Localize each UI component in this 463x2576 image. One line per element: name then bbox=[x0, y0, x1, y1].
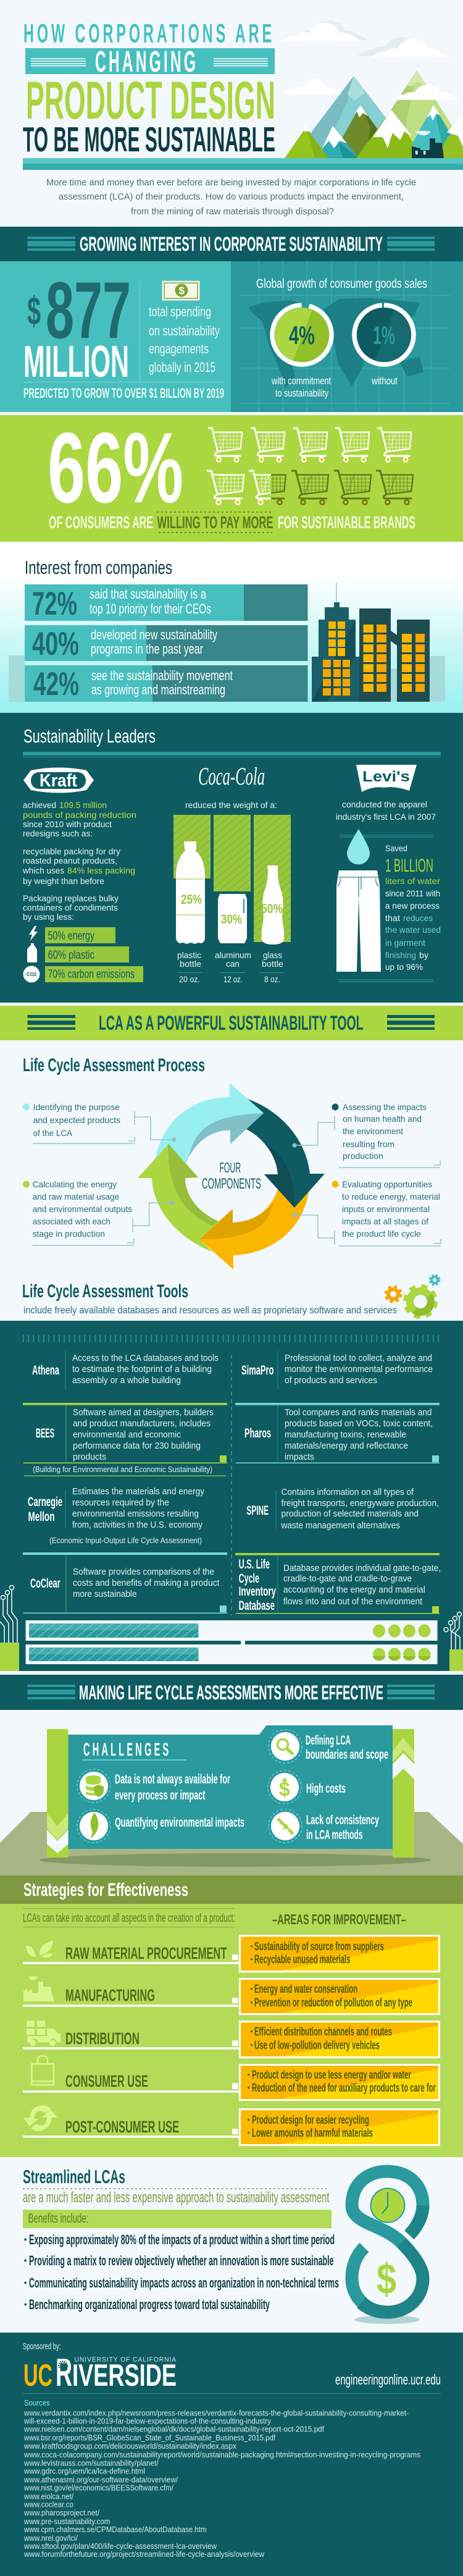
tool: BEES: environmental and economic bbox=[73, 1430, 181, 1440]
water savings text: in garment bbox=[385, 938, 425, 948]
title: CHANGING bbox=[95, 46, 198, 78]
callout: identifying bbox=[23, 1102, 176, 1143]
Kraft reduction bars: 70% carbon emissions bbox=[48, 968, 135, 981]
callout: identifying: and expected products bbox=[33, 1115, 120, 1125]
tool: Pharos: impacts bbox=[285, 1452, 314, 1462]
tool: CoClear: costs and benefits of making a product bbox=[73, 1578, 220, 1588]
Kraft reduction bars: CO2 bbox=[27, 972, 37, 977]
strategy: manufacturing: · bbox=[250, 1997, 254, 2010]
panel: interest from companies bbox=[0, 542, 463, 713]
tool: Carnegie Mellon: Estimates the materials and energy bbox=[72, 1487, 205, 1497]
strategy: post-consumer use: · bbox=[247, 2127, 251, 2140]
strategy: consumer use bbox=[23, 2056, 440, 2100]
panel: sustainability leaders bbox=[0, 713, 463, 1003]
tool: Carnegie Mellon: environmental emissions resulting bbox=[72, 1509, 199, 1519]
stat bar 42 bbox=[25, 665, 307, 702]
spending description: on sustainability bbox=[149, 323, 220, 339]
bottle labels: can bbox=[226, 959, 240, 969]
sources list: www.coca-colacompany.com/sustainabilityreport/world/sustainable-packaging.html#section-investing-in-recycling-programs bbox=[23, 2451, 420, 2459]
logo: Kraft bbox=[23, 767, 94, 793]
heading: Interest from companies bbox=[25, 557, 172, 578]
benefits list: · bbox=[23, 2297, 28, 2312]
tool: Athena: assembly or a whole building bbox=[72, 1376, 181, 1386]
Kraft text: redesigns such as: bbox=[23, 829, 93, 838]
Levi's text: conducted the apparel bbox=[342, 800, 427, 809]
callout: calculating: associated with each bbox=[33, 1216, 111, 1226]
tool: SimaPro: of products and services bbox=[285, 1376, 377, 1386]
callout: evaluating: Evaluating opportunities bbox=[342, 1179, 432, 1189]
strategy: post-consumer use: POST-CONSUMER USE bbox=[65, 2118, 179, 2136]
icon: time and money drop: $ bbox=[377, 2255, 396, 2303]
water savings text: finishing bbox=[385, 951, 416, 960]
benefits box: Benefits include: bbox=[28, 2212, 89, 2226]
heading: process: Life Cycle Assessment Process bbox=[23, 1055, 205, 1075]
strategy: post-consumer use: · bbox=[247, 2114, 251, 2127]
Kraft text: containers of condiments bbox=[23, 903, 118, 912]
callout: calculating bbox=[23, 1179, 174, 1245]
tool: BEES: and product manufacturers, includes bbox=[73, 1419, 211, 1429]
strategy: post-consumer use: Product design for easier recycling bbox=[252, 2114, 369, 2127]
heading: tools: include freely available databases and resources as well as proprietary software and services bbox=[23, 1305, 397, 1316]
Kraft text: Packaging replaces bulky bbox=[23, 894, 119, 903]
challenge: quantifying: Quantifying environmental impacts bbox=[115, 1816, 244, 1830]
lead-in: LCAs can take into account all aspects in the creation of a product: bbox=[23, 1912, 235, 1925]
sources list: www.gdrc.org/uem/lca/lca-define.html bbox=[23, 2467, 145, 2475]
challenge: costs bbox=[268, 1770, 346, 1804]
sources list: www.pre-sustainability.com bbox=[23, 2517, 110, 2526]
strategy: raw material procurement bbox=[23, 1936, 440, 1972]
heading: Streamlined LCAs bbox=[23, 2166, 125, 2187]
sources list: www.levistrauss.com/sustainability/planet/ bbox=[23, 2459, 159, 2467]
panel: strategies for effectiveness bbox=[0, 1875, 463, 2157]
stat bar 42: as growing and mainstreaming bbox=[91, 682, 225, 697]
logo: Coca-Cola: Coca-Cola bbox=[198, 762, 265, 790]
callout: assessing: the environment bbox=[343, 1126, 403, 1136]
big number 877 million: $ bbox=[27, 288, 41, 333]
strategy: consumer use: · bbox=[247, 2082, 251, 2095]
city buildings bbox=[312, 583, 430, 702]
panel: spending bbox=[0, 261, 231, 412]
Levi's text bbox=[336, 800, 436, 822]
challenge: costs: High costs bbox=[306, 1782, 346, 1796]
callout: assessing: resulting from bbox=[343, 1139, 394, 1149]
strategy: distribution bbox=[23, 2021, 440, 2057]
tool: Athena: Athena bbox=[32, 1363, 59, 1378]
water savings text: since 2011 with bbox=[385, 889, 440, 898]
chart: weight reduction bottles bbox=[173, 815, 291, 984]
aluminum can: 30% bbox=[221, 912, 242, 927]
Kraft reduction bars: 60% plastic bbox=[48, 949, 94, 962]
tool: SPINE: SPINE bbox=[247, 1504, 269, 1518]
callout: assessing: on human health and bbox=[343, 1114, 422, 1124]
logo: Kraft: Kraft bbox=[40, 771, 77, 791]
shopping carts bbox=[207, 428, 413, 510]
water savings text: up to 96% bbox=[385, 962, 423, 972]
tool: Pharos: Pharos bbox=[244, 1426, 271, 1441]
logo: UC Riverside: R bbox=[56, 2351, 72, 2394]
strategy: manufacturing bbox=[23, 1976, 440, 2014]
sources list: www.verdantix.com/index.php/newsroom/press-releases/verdantix-forecasts-the-global-sustainability-consulting-market- bbox=[23, 2409, 409, 2417]
stat bar 40 bbox=[25, 625, 307, 662]
tool: CoClear: more sustainable bbox=[73, 1589, 137, 1599]
tool: SPINE bbox=[247, 1488, 439, 1531]
tool: CoClear: CoClear bbox=[30, 1576, 60, 1591]
tool: Pharos bbox=[244, 1408, 433, 1462]
Kraft reduction bars: 50% energy bbox=[48, 930, 94, 943]
water savings text: reduces bbox=[403, 914, 433, 923]
Kraft text: achieved bbox=[23, 801, 56, 810]
stat bar 72: 72% bbox=[32, 586, 77, 622]
tool: SPINE: Contains information on all types of bbox=[282, 1488, 414, 1497]
challenge: quantifying bbox=[77, 1809, 244, 1843]
heading: tools: Life Cycle Assessment Tools bbox=[22, 1281, 188, 1302]
icon: water drop bbox=[347, 829, 370, 865]
pale background buildings bbox=[9, 655, 445, 702]
tool: CoClear bbox=[30, 1567, 220, 1599]
tool: U.S. Life Cycle Inventory Database: Database provides individual gate-to-gate, bbox=[283, 1564, 441, 1573]
donut: 1 percent: 1% bbox=[373, 321, 395, 350]
tool: Carnegie Mellon bbox=[28, 1487, 205, 1545]
donut labels bbox=[271, 375, 398, 399]
Kraft text bbox=[22, 801, 136, 922]
tool: SPINE: waste management alternatives bbox=[281, 1521, 400, 1531]
sources list bbox=[23, 2409, 420, 2559]
header illustration: mountains, clouds and factory bbox=[281, 21, 463, 159]
bottle labels bbox=[177, 951, 284, 984]
tool: U.S. Life Cycle Inventory Database: U.S. Life bbox=[239, 1557, 270, 1572]
tool: U.S. Life Cycle Inventory Database bbox=[239, 1557, 441, 1613]
strategy: raw material procurement: RAW MATERIAL PROCUREMENT bbox=[65, 1944, 227, 1963]
tool: SPINE: freight transports, energyware production, bbox=[282, 1499, 439, 1509]
server rack illustration bbox=[0, 1585, 463, 1671]
callout: calculating: stage in production bbox=[33, 1229, 105, 1239]
ground band bbox=[23, 158, 463, 170]
water savings text: by bbox=[419, 951, 428, 960]
benefits list: · bbox=[23, 2253, 28, 2268]
tool: Pharos: Tool compares and ranks materials and bbox=[285, 1408, 432, 1418]
tool: U.S. Life Cycle Inventory Database: flows into and out of the environment bbox=[283, 1597, 422, 1607]
logo: Levi's: Levi's bbox=[362, 768, 410, 785]
tool: Athena: to estimate the footprint of a building bbox=[72, 1365, 212, 1374]
section banner: making LCAs more effective bbox=[0, 1675, 463, 1710]
callout: evaluating: inputs or environmental bbox=[342, 1204, 430, 1214]
tool: Carnegie Mellon: from, activities in the U.S. economy bbox=[72, 1520, 203, 1530]
tool: SimaPro: monitor the environmental performance bbox=[285, 1365, 433, 1374]
big number 877 million: MILLION bbox=[23, 337, 129, 387]
tool: Carnegie Mellon: Mellon bbox=[28, 1510, 54, 1524]
consumers caption: WILLING TO PAY MORE bbox=[157, 513, 273, 532]
chart: four component cycle arrows: COMPONENTS bbox=[202, 1176, 261, 1192]
intro text bbox=[46, 177, 416, 217]
logo: UC Riverside: UNIVERSITY OF CALIFORNIA bbox=[75, 2356, 177, 2363]
tool: Pharos: products based on VOCs, toxic content, bbox=[285, 1419, 433, 1429]
panel: sustainability leaders: reduced the weight of a: bbox=[185, 801, 277, 810]
water savings text: Saved bbox=[385, 844, 407, 853]
benefits list: Benchmarking organizational progress toward total sustainability bbox=[29, 2297, 270, 2312]
tool: U.S. Life Cycle Inventory Database: accounting of the energy and material bbox=[283, 1585, 425, 1595]
strategy: manufacturing: MANUFACTURING bbox=[65, 1986, 155, 2005]
chart: four component cycle arrows: FOUR bbox=[220, 1160, 241, 1176]
logo: UC Riverside: UC bbox=[23, 2358, 52, 2393]
tool: U.S. Life Cycle Inventory Database: Inventory bbox=[239, 1585, 276, 1599]
strategy: post-consumer use: Lower amounts of harmful materials bbox=[252, 2127, 373, 2140]
benefits list: · bbox=[23, 2232, 28, 2247]
Kraft text: 109.5 million bbox=[59, 801, 107, 810]
section banner: growing interest bbox=[0, 227, 463, 261]
strategy: manufacturing: Energy and water conservation bbox=[254, 1983, 357, 1996]
consumers caption: OF CONSUMERS ARE bbox=[49, 513, 153, 532]
Kraft text: by using less: bbox=[23, 912, 74, 922]
stat bar 40: developed new sustainability bbox=[91, 627, 217, 642]
callout: assessing: Assessing the impacts bbox=[343, 1102, 427, 1112]
footer panel bbox=[0, 2333, 463, 2576]
bottle labels: glass bbox=[263, 951, 282, 960]
challenge: data: Data is not always available for bbox=[115, 1772, 230, 1787]
sources list: www.nrel.gov/lci/ bbox=[23, 2534, 78, 2543]
Kraft text: recyclable packing for dry bbox=[23, 847, 120, 856]
stat bar 72: said that sustainability is a bbox=[90, 586, 207, 602]
plastic bottle bbox=[176, 841, 205, 944]
sources list: www.coclear.co bbox=[23, 2501, 73, 2509]
benefits box bbox=[23, 2210, 332, 2228]
strategy: raw material procurement: · bbox=[250, 1953, 254, 1966]
tool: Pharos: manufacturing toxins, renewable bbox=[285, 1430, 406, 1440]
panel: streamlined LCAs bbox=[23, 2166, 423, 2324]
stat bar 72 bbox=[25, 584, 307, 622]
bottle labels: 8 oz. bbox=[264, 975, 280, 984]
callout: assessing bbox=[293, 1102, 440, 1168]
panel: tools directory bbox=[0, 1321, 463, 1671]
callout: identifying: of the LCA bbox=[33, 1128, 73, 1138]
callout: identifying: Identifying the purpose bbox=[33, 1102, 120, 1112]
callout: calculating: Calculating the energy bbox=[33, 1179, 117, 1189]
panel: global growth bbox=[231, 261, 463, 412]
callout: evaluating: to reduce energy, material bbox=[342, 1192, 440, 1202]
sources heading: Sources bbox=[24, 2399, 50, 2407]
benefits list bbox=[23, 2232, 339, 2312]
bottle labels: plastic bbox=[177, 951, 201, 960]
donut: 1 percent bbox=[354, 305, 414, 364]
icon: gears bbox=[385, 1275, 440, 1316]
strategy: consumer use: · bbox=[247, 2069, 251, 2082]
Kraft text: since 2010 with product bbox=[23, 820, 112, 829]
donut labels: to sustainability bbox=[275, 387, 328, 399]
sponsor: Sponsored by: bbox=[23, 2341, 60, 2352]
tool: U.S. Life Cycle Inventory Database: Cycle bbox=[239, 1572, 259, 1586]
tool: CoClear: Software provides comparisons of the bbox=[73, 1567, 214, 1577]
challenge: data bbox=[77, 1769, 230, 1803]
strategy: raw material procurement: · bbox=[250, 1940, 254, 1953]
sources list: www.cpm.chalmers.se/CPMDatabase/AboutDatabase.htm bbox=[23, 2525, 206, 2534]
donut: 4 percent bbox=[266, 299, 338, 371]
Kraft text: 84% less packing bbox=[67, 866, 135, 875]
big number 877 million bbox=[23, 265, 131, 387]
title bbox=[23, 19, 275, 159]
big number 877 million: 877 bbox=[46, 265, 131, 355]
challenge: boundaries: Defining LCA bbox=[306, 1733, 351, 1748]
challenge: boundaries bbox=[269, 1730, 388, 1763]
strategy: distribution: · bbox=[250, 2039, 254, 2052]
bottle labels: bottle bbox=[262, 959, 283, 969]
strategy: distribution: Use of low-pollution delivery vehicles bbox=[254, 2039, 380, 2052]
callout: calculating: and environmental outputs bbox=[33, 1204, 132, 1214]
heading: tools bbox=[22, 1281, 397, 1316]
Kraft text: by weight than before bbox=[23, 877, 104, 886]
heading: Strategies for Effectiveness bbox=[23, 1880, 188, 1900]
Kraft text: which uses bbox=[22, 866, 64, 875]
sources list: www.nist.gov/el/economics/BEESSoftware.cfm/ bbox=[23, 2483, 173, 2492]
Kraft text: roasted peanut products, bbox=[23, 856, 117, 865]
strategy: raw material procurement: Recyclable unused materials bbox=[254, 1953, 351, 1966]
stat bar 42: see the sustainability movement bbox=[91, 668, 233, 683]
glass bottle: 50% bbox=[261, 902, 283, 916]
tool: SPINE: production of selected materials and bbox=[282, 1509, 419, 1519]
challenge: boundaries: boundaries and scope bbox=[306, 1748, 388, 1762]
logo: UC Riverside bbox=[23, 2351, 177, 2394]
tool: BEES: performance data for 230 building bbox=[73, 1441, 201, 1451]
intro text: More time and money than ever before are being invested by major corporations in life cycle bbox=[46, 177, 416, 188]
logo: UC Riverside: IVERSIDE bbox=[72, 2358, 177, 2393]
aluminum can bbox=[218, 894, 247, 943]
section banner: LCA tool bbox=[0, 1006, 463, 1040]
donut labels: without bbox=[371, 375, 398, 387]
tool: BEES: (Building for Environmental and Economic Sustainability) bbox=[33, 1465, 212, 1474]
water savings text: that bbox=[385, 914, 400, 923]
bottle labels: 20 oz. bbox=[179, 975, 200, 984]
plastic bottle: 25% bbox=[181, 893, 202, 907]
water savings text bbox=[385, 844, 441, 972]
bottle labels: bottle bbox=[180, 959, 201, 969]
challenge: consistency: Lack of consistency bbox=[306, 1813, 379, 1827]
Levi's text: industry's first LCA in 2007 bbox=[336, 812, 436, 822]
strategy: distribution: · bbox=[250, 2026, 254, 2039]
spending description: engagements bbox=[149, 341, 209, 356]
glass bottle bbox=[261, 865, 284, 945]
stat bar 40: 40% bbox=[32, 626, 79, 662]
big number 66 percent: 66% bbox=[48, 412, 183, 524]
spending description: total spending bbox=[149, 304, 211, 319]
sources list: www.eiolca.net/ bbox=[23, 2492, 73, 2501]
stat bar 42: 42% bbox=[33, 666, 79, 702]
donut: 4 percent: 4% bbox=[289, 321, 315, 350]
callout: evaluating bbox=[293, 1179, 441, 1246]
sources list: www.bsr.org/reports/BSR_GlobeScan_State_of_Sustainable_Business_2015.pdf bbox=[23, 2434, 275, 2443]
tool: U.S. Life Cycle Inventory Database: Database bbox=[239, 1599, 275, 1613]
tool: Carnegie Mellon: Carnegie bbox=[28, 1495, 62, 1509]
chart: four component cycle arrows bbox=[138, 1083, 325, 1269]
tool: U.S. Life Cycle Inventory Database: cradle-to-gate and cradle-to-grave bbox=[283, 1574, 412, 1584]
tool: Athena bbox=[32, 1353, 219, 1386]
tool: SimaPro bbox=[241, 1353, 433, 1386]
tool: Carnegie Mellon: resources required by the bbox=[72, 1498, 169, 1508]
strategy: consumer use: CONSUMER USE bbox=[65, 2072, 148, 2090]
panel: challenges sign bbox=[0, 1725, 463, 1875]
prediction: PREDICTED TO GROW TO OVER $1 BILLION BY 2019 bbox=[23, 385, 224, 401]
consumers caption bbox=[49, 512, 415, 532]
tool: SimaPro: SimaPro bbox=[241, 1363, 274, 1378]
bottle labels: aluminum bbox=[215, 951, 251, 960]
sources list: www.nielsen.com/content/dam/nielsenglobal/dk/docs/global-sustainability-report-oct-2015.pdf bbox=[23, 2425, 324, 2434]
tool: BEES: BEES bbox=[36, 1426, 54, 1441]
tool: BEES bbox=[33, 1408, 214, 1474]
tool: SimaPro: Professional tool to collect, analyze and bbox=[285, 1353, 432, 1363]
Kraft text: pounds of packing reduction bbox=[23, 810, 136, 820]
icon: jeans bbox=[336, 870, 381, 972]
sources list: www.athenasmi.org/our-software-data/overview/ bbox=[23, 2475, 178, 2484]
challenge: costs: $ bbox=[279, 1778, 290, 1800]
strategy: post-consumer use bbox=[23, 2105, 440, 2145]
icon: time and money drop bbox=[352, 2171, 423, 2324]
tool: Athena: Access to the LCA databases and tools bbox=[72, 1353, 219, 1363]
icon: dollar bill bbox=[162, 281, 199, 300]
benefits list: · bbox=[23, 2275, 28, 2291]
water savings text: a new process bbox=[385, 901, 440, 911]
callout: assessing: production bbox=[343, 1151, 383, 1161]
sources list: www.forumforthefuture.org/project/streamlined-life-cycle-analysis/overview bbox=[23, 2550, 265, 2559]
spending description bbox=[149, 304, 220, 375]
logo: Levi's bbox=[356, 765, 417, 792]
tool: BEES: Software aimed at designers, builders bbox=[73, 1408, 214, 1418]
stat bar 40: programs in the past year bbox=[91, 641, 203, 657]
strategy: distribution: DISTRIBUTION bbox=[65, 2029, 140, 2048]
donut labels: with commitment bbox=[271, 375, 331, 387]
heading: Sustainability Leaders bbox=[23, 725, 156, 747]
strategy: manufacturing: · bbox=[250, 1983, 254, 1996]
icon: dollar bill: $ bbox=[179, 285, 185, 297]
sources list: www.sftool.gov/plan/400/life-cycle-assessment-lca-overview bbox=[23, 2542, 217, 2551]
water savings text: the water used bbox=[385, 925, 441, 935]
intro text: from the mining of raw materials through disposal? bbox=[131, 206, 334, 217]
spending description: globally in 2015 bbox=[149, 360, 215, 375]
intro text: assessment (LCA) of their products. How do various products impact the environment, bbox=[59, 192, 404, 202]
bottle labels: 12 oz. bbox=[223, 975, 243, 984]
tool: Carnegie Mellon: (Economic Input-Output Life Cycle Assessment) bbox=[49, 1536, 202, 1545]
world map bbox=[248, 298, 423, 388]
challenges heading: CHALLENGES bbox=[83, 1740, 172, 1760]
challenge: consistency: in LCA methods bbox=[306, 1828, 363, 1842]
sources list: www.pharosproject.net/ bbox=[23, 2509, 99, 2517]
water savings text: liters of water bbox=[385, 877, 441, 886]
tool: Pharos: materials/energy and reflectance bbox=[285, 1441, 408, 1451]
callout: calculating: and raw material usage bbox=[33, 1192, 119, 1202]
sources list: www.kraftfoodsgroup.com/deliciousworld/sustainability/index.aspx bbox=[23, 2442, 237, 2451]
panel: 66 percent of consumers bbox=[0, 412, 463, 542]
tool: BEES: products bbox=[73, 1452, 106, 1462]
Kraft reduction bars bbox=[23, 926, 143, 982]
clock bbox=[370, 2188, 405, 2223]
callout: evaluating: the product life cycle bbox=[342, 1229, 421, 1239]
callout: evaluating: impacts at all stages of bbox=[342, 1216, 428, 1226]
challenge: data: every process or impact bbox=[115, 1788, 206, 1803]
sources list: will-exceed-1-billion-in-2019-far-below-expectations-of-the-consulting-industry bbox=[23, 2417, 272, 2426]
stat bar 72: top 10 priority for their CEOs bbox=[90, 601, 211, 617]
challenge: consistency bbox=[269, 1809, 379, 1843]
